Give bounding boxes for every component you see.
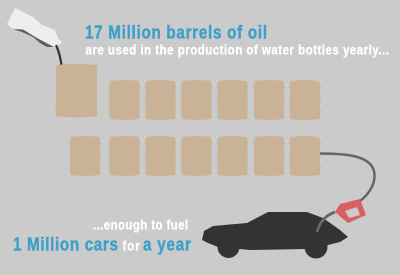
icon: fuel hose (320, 154, 375, 201)
heading: 17 Million barrels of oil: 17 Million barrels of oil (85, 22, 267, 43)
text: are used in the production: are used in the production of water bottles yearly... (86, 41, 389, 58)
icon: water bottle pouring oil (7, 8, 62, 65)
large oil barrel (55, 64, 98, 118)
icon: car (202, 212, 348, 258)
text: enough to fuel: ...enough to fuel (93, 216, 188, 233)
icon: fuel nozzle (317, 199, 366, 232)
top row of barrels (108, 80, 321, 120)
heading: a year: a year (143, 234, 191, 255)
bottom row of barrels (69, 136, 321, 176)
text: for: for (122, 237, 140, 254)
heading: 1 Million cars: 1 Million cars (13, 234, 118, 255)
